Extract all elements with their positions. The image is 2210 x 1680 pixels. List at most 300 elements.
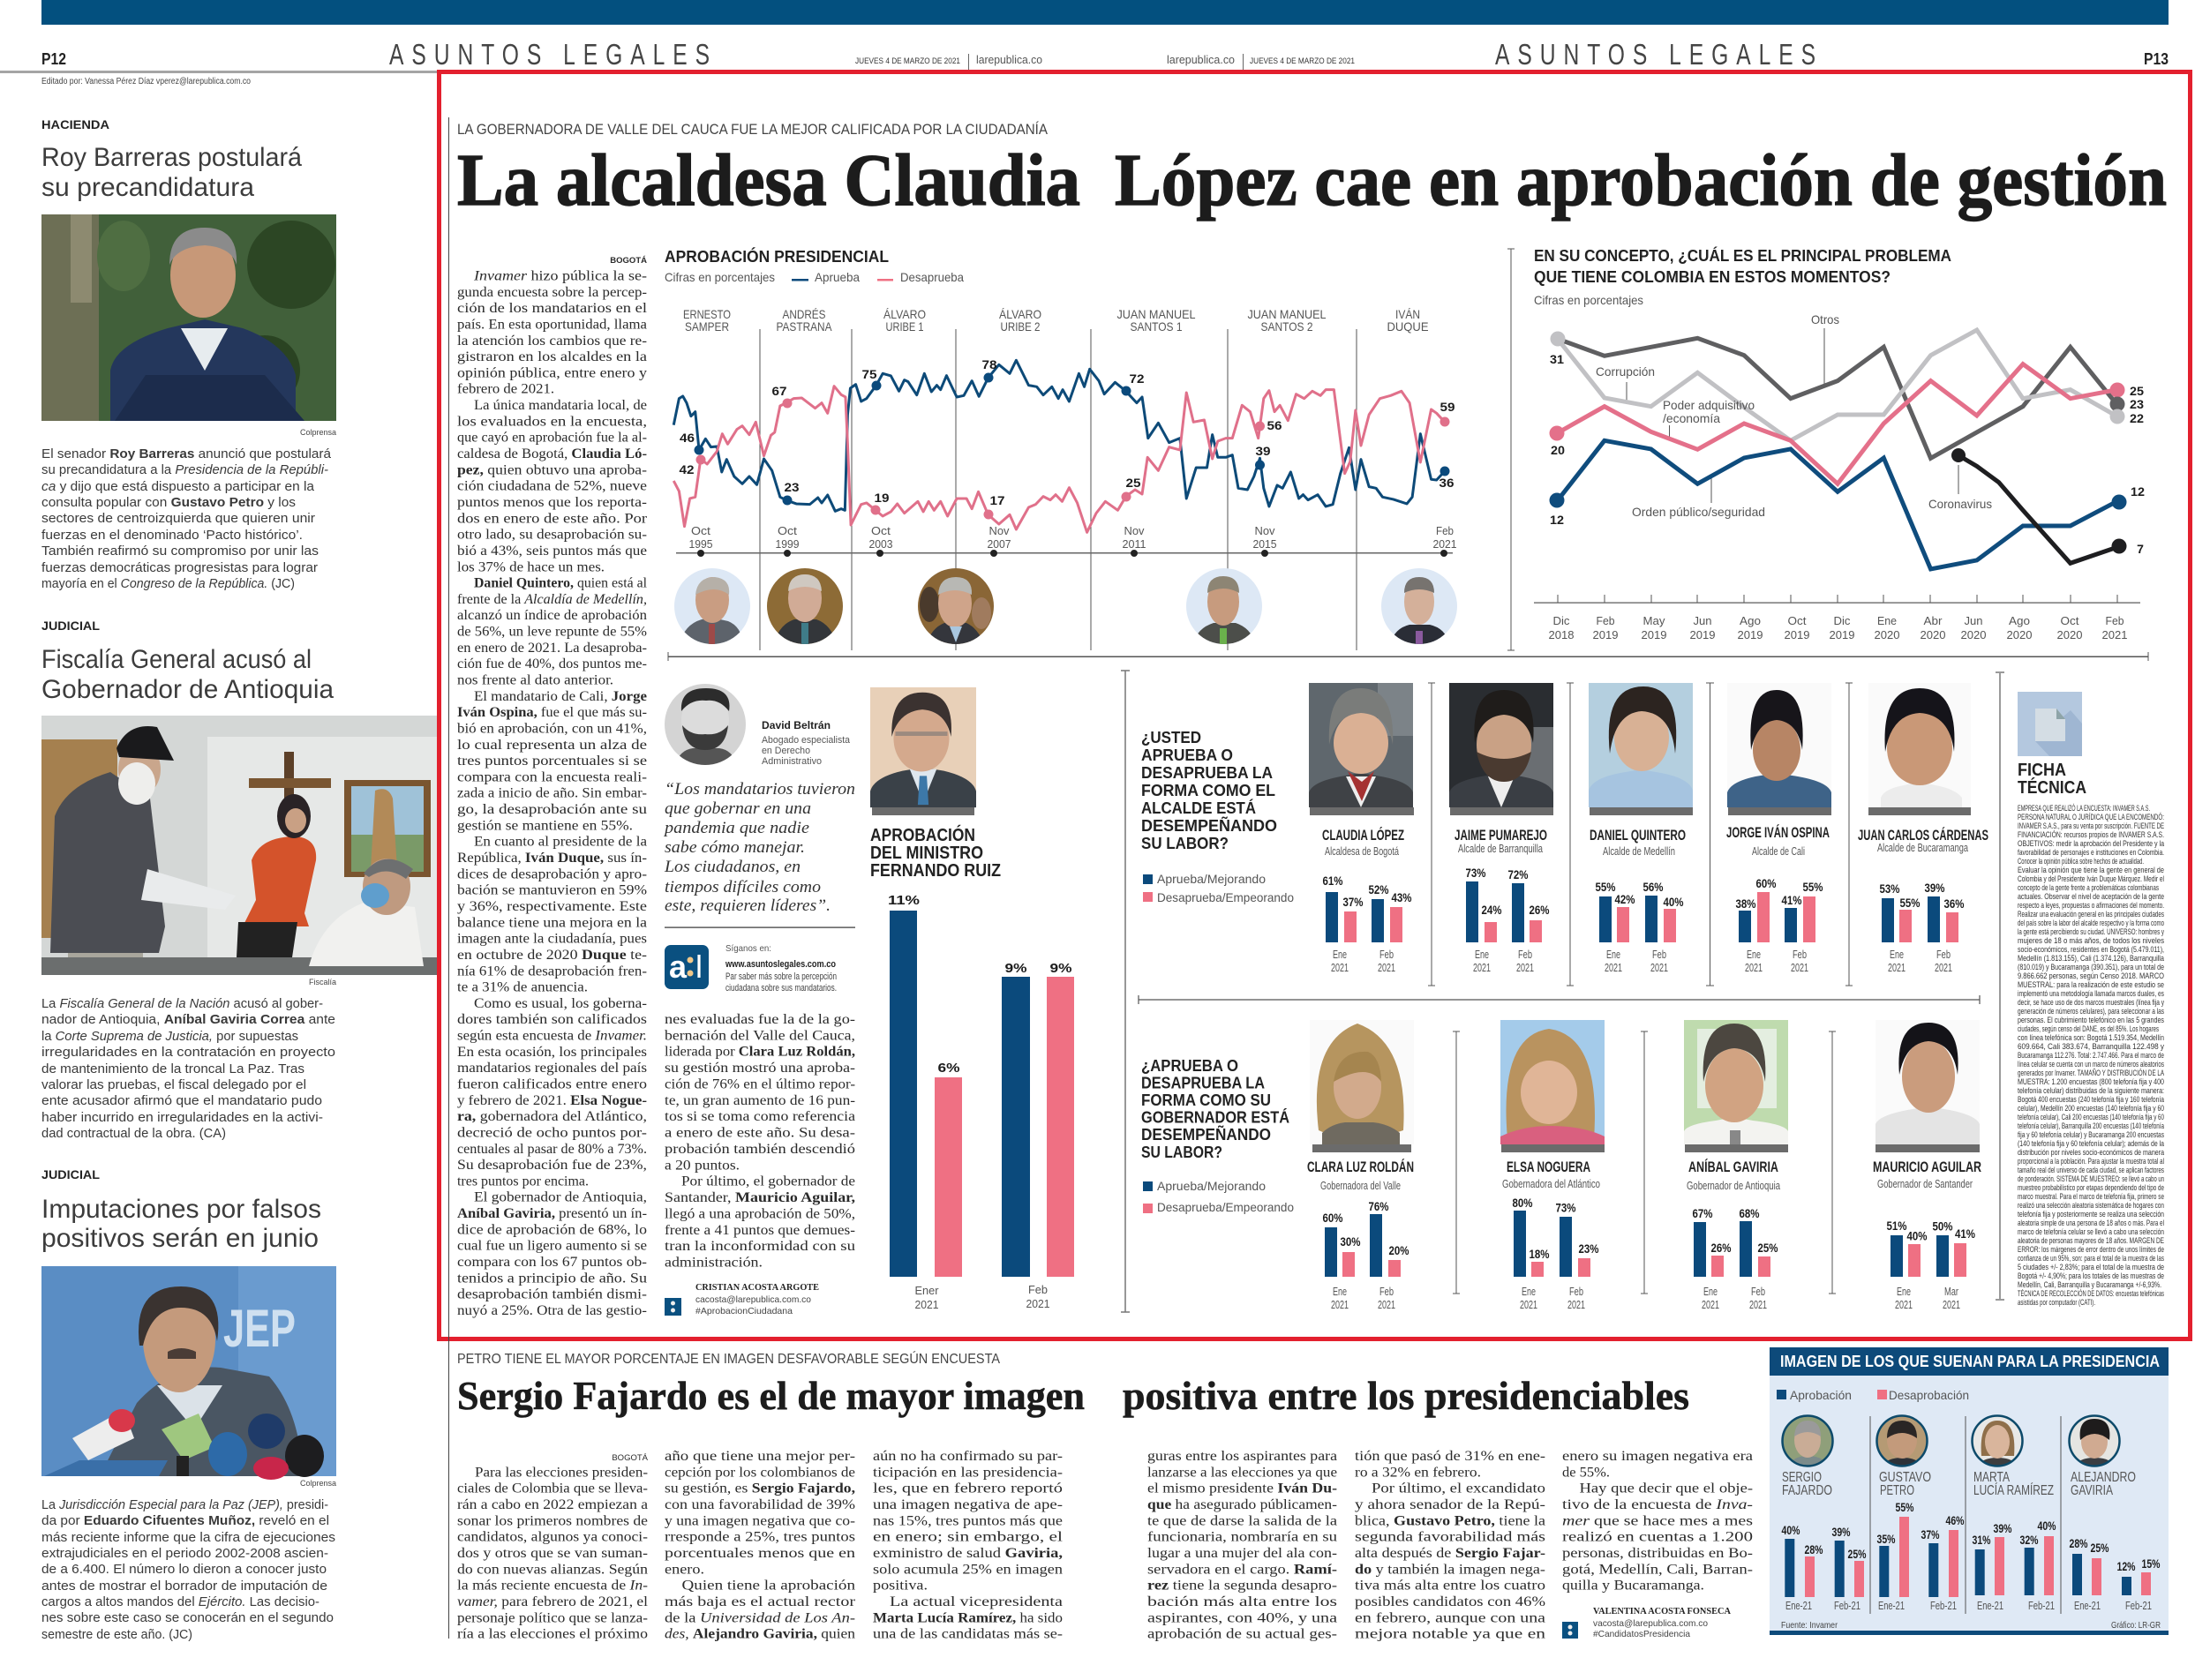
values: 59 — [1440, 400, 1455, 414]
bars: 20% — [1389, 1243, 1409, 1257]
photo: Mauricio Aguilar — [1875, 1020, 1980, 1144]
bars: 2021 — [1473, 961, 1491, 974]
legend — [1777, 1388, 1969, 1402]
main article column 1: go, la desaprobación ante su — [457, 802, 647, 817]
candidate: Alejandro Gaviria: 12% — [2116, 1559, 2136, 1573]
values: 39 — [1255, 444, 1271, 458]
values: 9% — [1004, 961, 1027, 976]
brief 3: JEP: La Jurisdicción Especial para la Paz (JEP), presidi- — [41, 1497, 328, 1512]
column 4: bación más alta entre los — [1147, 1594, 1337, 1609]
main article column 1: dores también son calificados — [457, 1012, 647, 1027]
main article column 1: Invamer hizo pública la se- — [473, 268, 647, 284]
column 3: una imagen negativa de ape- — [873, 1497, 1063, 1512]
president names: URIBE 1 — [886, 319, 924, 334]
main article column 1: nía 61% de desaprobación fren- — [457, 964, 647, 979]
quote text: pandemia que nadie — [663, 819, 809, 837]
column 5: mejora notable ya que en — [1355, 1627, 1545, 1642]
bars: 38% — [1735, 896, 1756, 911]
brief 2: Fiscalía: dad contractual de la obra. (CA) — [41, 1126, 226, 1141]
portrait: Duque — [1381, 568, 1457, 644]
quote text: Los ciudadanos, en — [664, 858, 801, 876]
column 3: les, que en febrero reportó — [873, 1481, 1063, 1496]
axis: Dic — [1834, 614, 1851, 627]
values: 25 — [2130, 384, 2144, 398]
bars: 42% — [1615, 892, 1635, 906]
section name left: ASUNTOS LEGALES — [389, 38, 718, 71]
axis: Oct — [1788, 614, 1807, 627]
bars: 55% — [1899, 896, 1921, 910]
bars — [1322, 874, 1412, 974]
governors question: ¿APRUEBA O — [1141, 1057, 1238, 1075]
photo: Aníbal Gaviria — [1684, 1020, 1788, 1144]
series labels: /economía — [1663, 411, 1720, 425]
main article column 1: gestión se mantiene en 55%. — [457, 818, 633, 833]
top blue band — [41, 0, 2169, 25]
bars: 53% — [1880, 881, 1900, 896]
bars: Feb — [1652, 948, 1666, 961]
column 2: cepción por los colombianos de — [665, 1465, 855, 1480]
panel: presidential hopefuls — [1770, 1347, 2169, 1635]
main article column 1: tres puntos porcentuales si se — [457, 754, 647, 769]
axis labels: 2021 — [914, 1298, 939, 1311]
timeline: Oct — [691, 524, 710, 537]
president names: JUAN MANUEL — [1117, 307, 1196, 321]
brief 1: Roy Barreras: su precandidatura a la Presidencia de la Repúbli- — [41, 462, 328, 477]
bars: Feb — [1518, 948, 1532, 961]
axis: 2020 — [2056, 628, 2083, 641]
series labels: Corrupción — [1596, 364, 1655, 379]
brief 1: Roy Barreras: El senador Roy Barreras anunció que postulará — [41, 446, 332, 461]
main article column 1: La única mandataria local, de — [474, 398, 647, 413]
column 6: enero su imagen negativa era — [1562, 1449, 1753, 1464]
column 1 — [457, 1453, 649, 1642]
bars: 50% — [1933, 1219, 1953, 1234]
values: 22 — [2130, 411, 2144, 425]
column 4: que ha asegurado públicamen- — [1147, 1497, 1337, 1512]
second story body — [457, 1449, 1753, 1642]
governors question: SU LABOR? — [1141, 1144, 1222, 1161]
mayors question: FORMA COMO EL — [1141, 782, 1275, 799]
legend: Aprobación — [1790, 1388, 1852, 1402]
column 4: te que de darse la salida de la — [1147, 1513, 1337, 1528]
byline: main story: #AprobacionCiudadana — [695, 1306, 793, 1316]
values: 78 — [981, 357, 997, 371]
logo: a:l — [665, 945, 709, 989]
candidate: Gustavo Petro: 35% — [1876, 1532, 1896, 1546]
brief 2: Fiscalía: JUDICIAL — [41, 619, 100, 633]
sheet text: 9.866.662 personas, según Censo 2018. MARCO — [2018, 971, 2164, 981]
candidate: Sergio Fajardo: Feb-21 — [1834, 1599, 1860, 1612]
president names: ERNESTO — [683, 307, 731, 321]
legend: Desaprobación — [1889, 1388, 1969, 1402]
president names: ÁLVARO — [883, 307, 926, 321]
main article column 1: Iván Ospina, fue el que más su- — [457, 705, 647, 720]
main article column 2: liderada por Clara Luz Roldán, — [665, 1045, 855, 1060]
brief 1: Roy Barreras — [41, 117, 336, 591]
name: ELSA NOGUERA — [1507, 1159, 1590, 1175]
values: 23 — [2130, 397, 2144, 411]
governor: Clara Luz Roldán: Gobernadora del Valle — [1320, 1179, 1401, 1192]
bars: 76% — [1368, 1199, 1389, 1213]
bars: 41% — [1955, 1226, 1975, 1241]
photo: Jorge Iván Ospina — [1727, 683, 1831, 807]
main article column 1: El gobernador de Antioquia, — [474, 1190, 647, 1205]
values: 42 — [680, 462, 695, 476]
portrait: Pastrana — [767, 568, 843, 644]
axis: Ene — [1877, 614, 1897, 627]
governors question: GOBERNADOR ESTÁ — [1141, 1108, 1289, 1126]
candidate: Gustavo Petro: 55% — [1896, 1500, 1914, 1514]
timeline: Oct — [778, 524, 797, 537]
governor: Mauricio Aguilar — [1873, 1020, 1981, 1311]
column 1: personaje político que se lanza- — [457, 1610, 648, 1625]
headline left: Sergio Fajardo es el de mayor imagen — [457, 1374, 1085, 1418]
expert role: en Derecho — [762, 746, 810, 756]
main article column 1: febrero de 2021. — [457, 382, 554, 397]
chart title: DEL MINISTRO — [870, 844, 983, 863]
main article column 1: bación se mantuvieron en 59% — [457, 883, 647, 898]
president names: ANDRÉS — [782, 307, 826, 321]
main article column 1: otro lado, su desaprobación su- — [457, 528, 647, 543]
bars: 51% — [1887, 1219, 1907, 1233]
axis: 2019 — [1642, 628, 1666, 641]
site left: larepublica.co — [976, 53, 1042, 66]
main article column 1: puntos menos que los reporta- — [457, 495, 647, 510]
main article column 1: la atención los cambios que re- — [457, 334, 647, 349]
main article column 2: bernación del Valle del Cauca, — [665, 1028, 855, 1043]
values: 31 — [1550, 352, 1564, 366]
brief 2: Fiscalía: ente acusador afirmó que el mandatario pudo — [41, 1093, 322, 1108]
column 2: año que tiene una mejor per- — [665, 1449, 855, 1464]
bars: Feb — [1751, 1285, 1765, 1298]
brief 1: Roy Barreras: su precandidatura — [41, 173, 254, 202]
column 2: porcentuales menos que en — [665, 1546, 855, 1561]
chart: presidential approval — [665, 247, 1457, 650]
headline right: positiva entre los presidenciables — [1123, 1374, 1689, 1418]
column 2: enero. — [665, 1562, 704, 1577]
column 6: de 55%. — [1562, 1465, 1610, 1480]
brief 3: JEP: más reciente informe que la cifra de ejecuciones — [41, 1530, 335, 1545]
bars — [1322, 1199, 1409, 1311]
main article column 1: mandatarios regionales del país — [457, 1061, 647, 1076]
horizontal section rule — [668, 656, 2148, 657]
main article column 2: llegó a una aprobación de 50%, — [665, 1206, 855, 1221]
timeline: Feb — [1436, 524, 1454, 537]
mayor: Jaime Pumarejo: Alcalde de Barranquilla — [1458, 842, 1544, 855]
timeline: 2011 — [1123, 537, 1146, 551]
main article column 2: a 20 puntos. — [665, 1158, 740, 1173]
main article column 1: centuales al pasar de 80% a 73%. — [457, 1142, 647, 1157]
bars: 2021 — [1605, 961, 1622, 974]
expert role — [762, 735, 851, 767]
main article column 1: dos en enero de este año. Por — [457, 511, 648, 526]
bars: 2021 — [1650, 961, 1668, 974]
main article column 1: En cuanto al presidente de la — [474, 835, 647, 850]
candidate: Marta Lucía Ramírez: MARTA — [1973, 1470, 2010, 1485]
byline: main story: cacosta@larepublica.com.co — [695, 1294, 811, 1305]
axis: 2019 — [1592, 628, 1619, 641]
bars: 52% — [1368, 882, 1389, 896]
quote text: este, requieren líderes”. — [665, 896, 831, 915]
axis: Ago — [1740, 614, 1761, 627]
markers — [694, 372, 1449, 519]
main article column 2: te, un gran aumento de 16 pun- — [665, 1093, 855, 1108]
legend: Desaprueba — [900, 270, 964, 284]
candidate: Alejandro Gaviria: Feb-21 — [2125, 1599, 2152, 1612]
bars: 23% — [1578, 1241, 1599, 1256]
candidate: Sergio Fajardo: FAJARDO — [1782, 1483, 1832, 1498]
byline: second story — [1562, 1607, 1731, 1639]
candidate: Gustavo Petro: 37% — [1921, 1527, 1940, 1541]
candidate: Marta Lucía Ramírez: 40% — [2037, 1519, 2056, 1533]
main article column 2: nes evaluadas fue la de la go- — [665, 1012, 855, 1027]
bars: 26% — [1710, 1241, 1732, 1255]
photo: Claudia López — [1309, 683, 1413, 807]
brief 3: JEP: cargos a altos mandos del Ejército. Las decisio- — [41, 1594, 319, 1609]
site right: larepublica.co — [1167, 53, 1235, 66]
main article column 1: imagen ante la ciudadanía, pues — [457, 932, 647, 947]
column 6 — [1562, 1449, 1753, 1594]
column 3: positiva. — [873, 1579, 928, 1594]
main article column 1: según esta encuesta de Invamer. — [457, 1029, 647, 1043]
second story header — [457, 1350, 1689, 1418]
brief 3: JEP: antes de mostrar el borrador de imputación de — [41, 1579, 327, 1594]
candidate: Gustavo Petro: GUSTAVO — [1879, 1470, 1931, 1485]
headline left: La alcaldesa Claudia — [457, 139, 1080, 221]
bars: Feb — [1793, 948, 1807, 961]
main article column 1: El mandatario de Cali, Jorge — [474, 689, 647, 704]
main article column 2: Santander, Mauricio Aguilar, — [665, 1190, 855, 1205]
column 5: tiva más alta entre los cuatro — [1355, 1579, 1545, 1594]
axis: 2021 — [2102, 628, 2127, 641]
main article column 1: en octubre de 2020 Duque te- — [457, 948, 647, 963]
main article column 1: decreció de ocho puntos por- — [457, 1126, 647, 1140]
candidate: Sergio Fajardo: 40% — [1781, 1523, 1800, 1537]
callout: follow us — [665, 943, 837, 994]
axis: 2019 — [1737, 628, 1763, 641]
bars: 24% — [1481, 903, 1502, 917]
mayor: Claudia López — [1309, 683, 1414, 974]
brief 3: JEP: JUDICIAL — [41, 1167, 100, 1181]
legend: Cifras en porcentajes — [665, 270, 775, 284]
bars: Feb — [1569, 1285, 1583, 1298]
axis: Jun — [1693, 614, 1712, 627]
lines — [1558, 330, 2119, 569]
bars: Ene — [1333, 1285, 1347, 1298]
bars: 60% — [1322, 1211, 1343, 1225]
brief 3: JEP: Imputaciones por falsos — [41, 1195, 321, 1224]
main article column 2: su gestión mostró una aproba- — [665, 1061, 855, 1076]
values: 6% — [937, 1061, 960, 1076]
bars: 2021 — [1331, 961, 1349, 974]
column 3: nas 15%, tres puntos más que — [873, 1513, 1063, 1528]
column 3: en enero; sin embargo, el — [873, 1530, 1063, 1545]
column 1: BOGOTÁ — [612, 1453, 649, 1463]
panel header — [1770, 1347, 2169, 1376]
brief 2: Fiscalía: de mantenimiento de la troncal La Paz. Tras — [41, 1061, 304, 1076]
panel: technical sheet: TÉCNICA — [2018, 777, 2086, 798]
panel: minister approval chart — [870, 687, 1074, 1311]
bars: 43% — [1391, 890, 1412, 904]
candidate: Gustavo Petro: 46% — [1945, 1513, 1965, 1527]
brief 2: Fiscalía: Fiscalía General acusó al — [41, 645, 312, 674]
page number left: P12 — [41, 50, 66, 68]
photo: Juan Carlos Cárdenas — [1868, 683, 1971, 807]
bars: 40% — [1663, 895, 1684, 909]
bars: Ene — [1747, 948, 1761, 961]
photo: Roy Barreras — [41, 214, 336, 421]
governor: Elsa Noguera: Gobernadora del Atlántico — [1502, 1177, 1600, 1190]
brief 3: JEP: semestre de este año. (JC) — [41, 1627, 192, 1642]
bars — [1735, 876, 1823, 974]
chart: main problem — [1534, 246, 2145, 641]
series labels: Orden público/seguridad — [1632, 505, 1765, 519]
candidate: Marta Lucía Ramírez: 31% — [1972, 1533, 1991, 1547]
candidate: Alejandro Gaviria: 15% — [2141, 1556, 2161, 1571]
president names: SANTOS 1 — [1130, 319, 1183, 334]
quote text: tiempos difíciles como — [665, 878, 821, 896]
axis: 2020 — [1875, 628, 1899, 641]
bars: 26% — [1529, 903, 1550, 917]
column 4: aprobación de su actual ges- — [1147, 1627, 1337, 1642]
president names: SANTOS 2 — [1260, 319, 1313, 334]
bars: 2021 — [1520, 1298, 1537, 1311]
photo: Sergio Fajardo — [1781, 1414, 1834, 1469]
president names — [683, 307, 1428, 334]
bars: 36% — [1943, 896, 1965, 911]
sheet text: MUESTRA: 1.200 encuestas (800 telefonía fija y 400 — [2018, 1077, 2164, 1087]
column 3: exministro de salud Gaviria, — [873, 1546, 1063, 1561]
bars: 2021 — [1516, 961, 1534, 974]
main article column 1: caldesa de Bogotá, Claudia Ló- — [457, 446, 647, 461]
main article column 1: gistraron en los alcaldes en la — [457, 349, 647, 364]
axis: 2019 — [1689, 628, 1716, 641]
column 5: alta después de Sergio Fajar- — [1355, 1546, 1545, 1561]
column 4 — [1147, 1449, 1337, 1642]
main article column 1: compara con los 67 puntos ob- — [457, 1255, 647, 1270]
expert role: Administrativo — [762, 756, 822, 767]
main article column 1: gunda encuesta sobre la percep- — [457, 285, 647, 300]
byline: second story: vacosta@larepublica.com.co — [1593, 1618, 1708, 1629]
column 2: su gestión, es Sergio Fajardo, — [665, 1481, 855, 1496]
sheet text: 609.664, Cali 383.674, Barranquilla 122.498 y — [2018, 1042, 2164, 1052]
main article column 1: país. En esta oportunidad, llama — [457, 318, 647, 332]
sheet text: actuales. Observar el nivel de aceptación de la gente — [2018, 892, 2164, 902]
bars — [1693, 1206, 1778, 1311]
column 5: Por último, el excandidato — [1372, 1481, 1545, 1496]
bars: Ene — [1897, 1285, 1911, 1298]
brief 1: Roy Barreras: mayoría en el Congreso de la República. (JC) — [41, 576, 295, 591]
values — [1550, 352, 2145, 556]
timeline: 2003 — [868, 537, 893, 551]
bars: Ene — [1475, 948, 1489, 961]
bars: 55% — [1596, 880, 1616, 894]
sheet text: mujeres de 18 o más años, de todos los niveles — [2018, 936, 2164, 946]
column 1: vamer, para febrero de 2021, el — [457, 1594, 648, 1609]
values: 19 — [874, 491, 890, 505]
name: CLARA LUZ ROLDÁN — [1307, 1159, 1414, 1175]
brief 2: Fiscalía: irregularidades en la contratación en proyecto — [41, 1045, 335, 1060]
candidate: Marta Lucía Ramírez — [1971, 1414, 2056, 1612]
main article column 1: lo cual representa un alza de — [457, 738, 647, 753]
section name right: ASUNTOS LEGALES — [1495, 38, 1823, 71]
bars: 67% — [1693, 1206, 1713, 1220]
column 1: dos y otros que se van suman- — [457, 1546, 648, 1561]
column 4: el mismo presidente Iván Du- — [1147, 1481, 1337, 1496]
mayor: Claudia López: Alcaldesa de Bogotá — [1325, 844, 1400, 858]
column 6: gotá, Medellín, Cali, Barran- — [1562, 1562, 1753, 1577]
main article column 1: Daniel Quintero, quien está al — [474, 576, 647, 591]
candidate: Sergio Fajardo: SERGIO — [1782, 1470, 1822, 1485]
panel: mayors — [1139, 683, 1988, 1004]
byline: main story — [665, 1283, 819, 1316]
sheet text: Evaluar la opinión que tiene la gente en general de — [2018, 866, 2164, 875]
photo: Gustavo Petro — [1875, 1414, 1928, 1469]
values: 11% — [888, 893, 920, 908]
axis: 2019 — [1785, 628, 1809, 641]
main article column 2 — [665, 1012, 855, 1271]
main article column 1 — [457, 256, 648, 1318]
values: 46 — [680, 431, 695, 445]
page number right: P13 — [2144, 50, 2169, 68]
sidebar: briefs — [41, 117, 437, 1642]
axis labels — [914, 1283, 1050, 1311]
axis: 2018 — [1548, 628, 1575, 641]
values: 17 — [990, 493, 1005, 507]
heading: FICHA — [2018, 761, 2066, 780]
column 6: tivo de la encuesta de Inva- — [1562, 1497, 1753, 1512]
headline right: López cae en aprobación de gestión — [1115, 139, 2167, 221]
brief 2: Fiscalía — [41, 619, 437, 1141]
bars: 2021 — [1791, 961, 1808, 974]
axis: Feb — [2106, 614, 2124, 627]
brief 3: JEP: nes sobre este caso se conocerán en el segundo — [41, 1610, 334, 1625]
deck: LA GOBERNADORA DE VALLE DEL CAUCA FUE LA MEJOR CALIFICADA POR LA CIUDADANÍA — [457, 121, 1049, 138]
brief 2: Fiscalía: haber incurrido en irregularidades en la activi- — [41, 1110, 323, 1125]
column 1: la más reciente encuesta de In- — [457, 1579, 648, 1594]
photo: Clara Luz Roldán — [1310, 1020, 1414, 1144]
bars: Feb — [1936, 948, 1951, 961]
column 1: ciales de Colombia que se lleva- — [457, 1481, 648, 1496]
brief 1: Roy Barreras: sectores de centroizquierda que quieren unir — [41, 511, 315, 526]
brief 1: Roy Barreras: consulta popular con Gustavo Petro y los — [41, 495, 296, 510]
byline: second story: #CandidatosPresidencia — [1593, 1629, 1690, 1639]
sheet text: personas. El cubrimiento telefónico en las 5 grandes — [2018, 1016, 2164, 1025]
bars: 30% — [1340, 1234, 1361, 1249]
expert name: David Beltrán — [762, 721, 831, 731]
brief 3: JEP: Colprensa — [300, 1479, 336, 1488]
name: ANÍBAL GAVIRIA — [1688, 1159, 1778, 1175]
vertical divider top charts — [1507, 249, 1515, 650]
axis labels: Ener — [914, 1284, 939, 1297]
mayor: Jorge Iván Ospina: Alcalde de Cali — [1752, 844, 1805, 858]
column 6: mer que se hace mes a mes — [1562, 1513, 1753, 1528]
line: approval — [673, 360, 1445, 511]
main article column 1: que cayó en aprobación fue la al- — [457, 431, 647, 446]
column 2: de la Universidad de Los An- — [665, 1610, 855, 1625]
bars: 72% — [1507, 867, 1529, 881]
sheet text: asistidas por computador (CATI). — [2018, 1298, 2095, 1308]
brief 1: Roy Barreras: fuerzas democráticas progresistas para lograr — [41, 560, 318, 575]
axis: 2020 — [1961, 628, 1986, 641]
axis: 2019 — [1829, 628, 1855, 641]
main article column 1: opinión pública, entre enero y — [457, 365, 647, 380]
main article column 1: alcanzó un índice de aprobación — [457, 608, 647, 623]
chart title: FERNANDO RUIZ — [870, 861, 1001, 881]
main article column 1: ción fue de 40%, dos puntos me- — [457, 656, 647, 671]
bars — [1887, 1219, 1975, 1311]
bars: Mar — [1944, 1285, 1958, 1298]
